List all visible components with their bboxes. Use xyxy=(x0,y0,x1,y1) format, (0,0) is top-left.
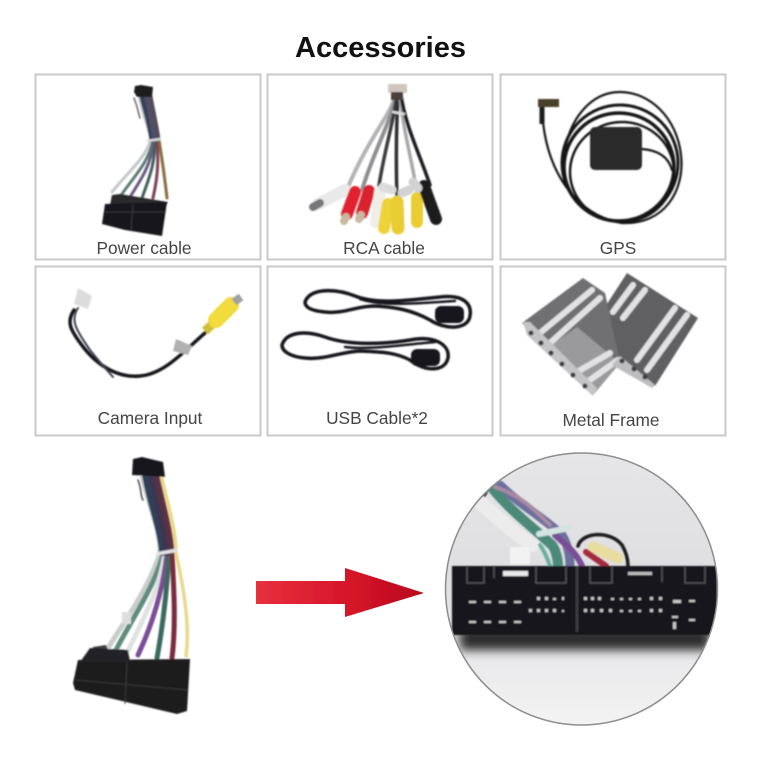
title: Accessories xyxy=(295,32,466,64)
connector close-up circle xyxy=(440,450,725,730)
large wiring harness xyxy=(73,457,190,714)
panel: camera input xyxy=(36,266,260,436)
label: Camera Input xyxy=(98,408,203,428)
panel: RCA cable xyxy=(268,74,492,260)
panel: GPS xyxy=(500,74,726,260)
panel: metal frame xyxy=(500,266,726,436)
plugs xyxy=(313,182,436,228)
icon: metal frames xyxy=(522,273,698,396)
icon: GPS antenna xyxy=(538,92,682,223)
icon: USB cables xyxy=(282,291,470,369)
icon: camera input cable xyxy=(70,288,241,377)
icon: power cable harness xyxy=(102,85,168,236)
panel: power cable xyxy=(36,74,260,260)
label: GPS xyxy=(600,238,636,258)
label: USB Cable*2 xyxy=(326,408,428,428)
panel: USB cable xyxy=(268,266,492,436)
label: RCA cable xyxy=(343,238,425,258)
arrow xyxy=(256,568,424,617)
icon: RCA cable xyxy=(313,84,436,228)
label: Metal Frame xyxy=(562,410,660,430)
label: Power cable xyxy=(96,238,192,258)
